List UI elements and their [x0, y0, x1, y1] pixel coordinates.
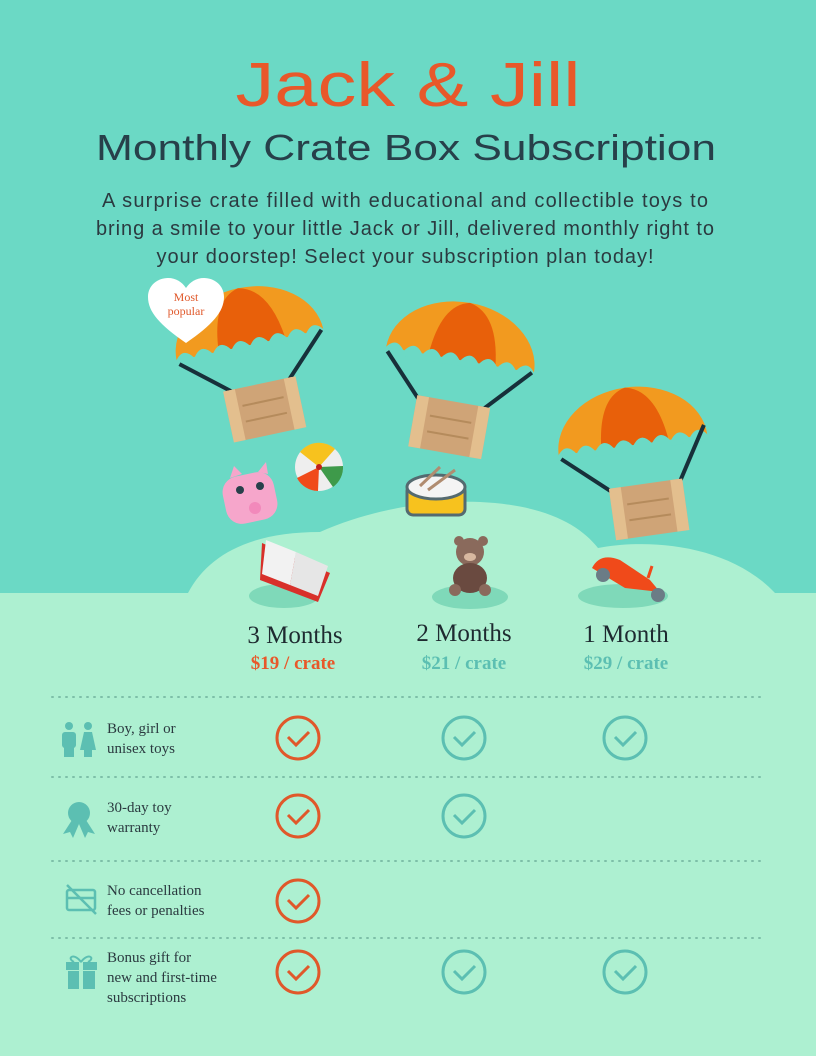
icon: toy car — [578, 557, 668, 608]
parachute 1 with crate — [164, 272, 343, 451]
row: warranty: 30-day toy — [107, 800, 172, 816]
row: warranty: warranty — [107, 820, 161, 836]
column: 1 month — [583, 621, 669, 674]
icon: crossed card — [67, 885, 96, 914]
column: 2 months: $21 / crate — [422, 653, 506, 674]
intro text — [96, 190, 714, 268]
column: 3 months — [247, 622, 343, 674]
column: 3 months: $19 / crate — [251, 653, 335, 674]
badge: most popular heart — [148, 278, 224, 343]
icon: book — [249, 540, 330, 608]
icon: boy and girl — [62, 722, 96, 757]
parachute 3 with crate — [550, 377, 721, 547]
column: 3 months: 3 Months — [247, 622, 343, 649]
icon: award ribbon — [63, 802, 95, 838]
row: boy girl unisex: unisex toys — [107, 741, 175, 757]
icon: drum — [407, 467, 465, 515]
row: boy girl unisex: Boy, girl or — [107, 721, 176, 737]
parachute 2 with crate — [369, 290, 545, 466]
row: warranty — [63, 795, 485, 838]
icon: pink plush — [220, 462, 280, 527]
row: no cancellation — [67, 880, 319, 922]
column: 1 month: $29 / crate — [584, 653, 668, 674]
column: 1 month: 1 Month — [583, 621, 669, 648]
column: 2 months: 2 Months — [416, 620, 512, 647]
row: no cancellation: No cancellation — [107, 883, 202, 899]
column: 2 months — [416, 620, 512, 674]
subtitle: Monthly Crate Box Subscription — [96, 127, 716, 168]
icon: teddy bear — [432, 536, 508, 609]
row: no cancellation: fees or penalties — [107, 903, 205, 919]
row: bonus gift: new and first-time — [107, 970, 217, 986]
badge: most popular heart: popular — [168, 304, 204, 318]
intro text: A surprise crate filled with educational and collectible toys to — [102, 190, 708, 212]
background: mint ground with hills — [0, 502, 816, 1056]
row: boy girl unisex — [62, 717, 646, 759]
icon: gift — [66, 957, 97, 989]
row: bonus gift: subscriptions — [107, 990, 186, 1006]
row: bonus gift: Bonus gift for — [107, 950, 191, 966]
icon: beach ball — [295, 443, 343, 491]
intro text: your doorstep! Select your subscription plan today! — [156, 246, 654, 268]
row: bonus gift — [66, 950, 646, 1006]
intro text: bring a smile to your little Jack or Jill, delivered monthly right to — [96, 218, 714, 240]
title: Jack & Jill — [236, 51, 580, 120]
badge: most popular heart: Most — [174, 290, 199, 304]
